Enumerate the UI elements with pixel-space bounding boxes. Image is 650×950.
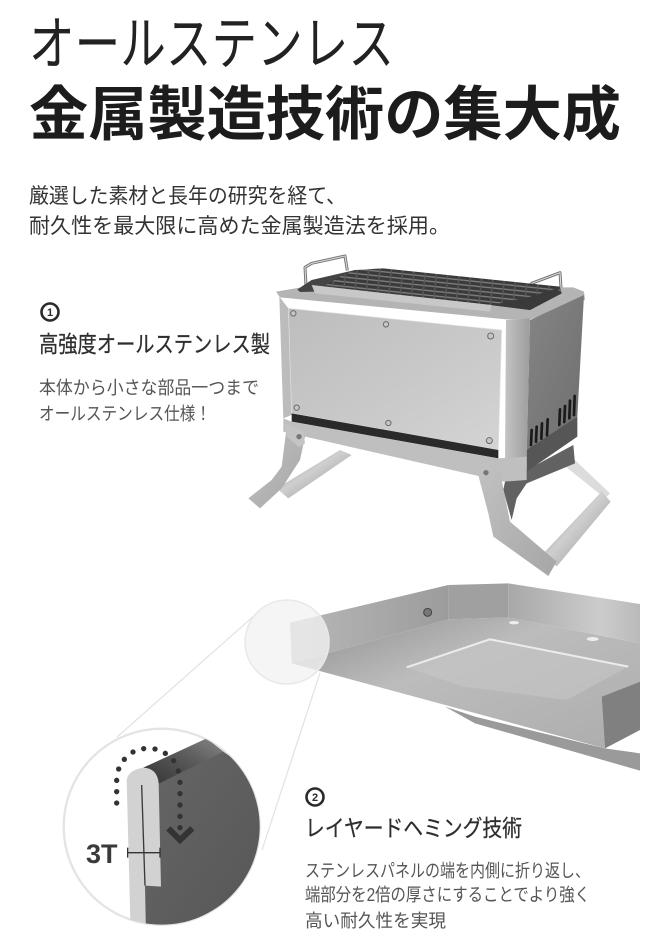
magnifier circle — [245, 600, 329, 684]
handles — [305, 256, 562, 310]
description 2: 高い耐久性を実現 — [305, 911, 446, 931]
icon: number 1: 1 — [47, 307, 53, 319]
bolt — [424, 608, 432, 616]
bottom band — [283, 418, 527, 482]
dotted arrow — [114, 746, 192, 840]
front right wall — [602, 682, 640, 748]
description 1 — [39, 378, 259, 424]
corner post — [505, 318, 530, 460]
top plate — [276, 287, 585, 319]
label: 3T: 3T — [86, 839, 118, 869]
right wall — [508, 583, 640, 643]
rear leg and bar — [248, 427, 611, 567]
dark band — [292, 413, 498, 458]
icon: number 1 — [42, 304, 58, 320]
heading: high strength stainless: 高強度オールステンレス製 — [39, 331, 270, 357]
section 2 text — [305, 788, 590, 931]
grill grate — [297, 268, 562, 312]
dark panel face — [143, 750, 260, 925]
intro text: 厳選した素材と長年の研究を経て、 — [29, 185, 346, 208]
inset ridge — [407, 639, 628, 667]
description 1: 本体から小さな部品一つまで — [39, 378, 259, 398]
icon: number 2 — [306, 788, 324, 806]
heading: layered hemming: レイヤードヘミング技術 — [305, 815, 522, 841]
fold line — [142, 785, 145, 886]
cross section — [127, 768, 161, 933]
screws — [291, 311, 494, 444]
title: line 1: オールステンレス — [29, 12, 394, 77]
description 2: ステンレスパネルの端を内側に折り返し、 — [305, 861, 590, 881]
intro text — [29, 185, 450, 238]
section 1 text — [39, 304, 270, 424]
left wall — [290, 585, 448, 663]
front panel — [288, 308, 502, 450]
underside — [445, 707, 640, 771]
title: line 2: 金属製造技術の集大成 — [29, 82, 621, 148]
inset panel — [407, 639, 628, 700]
description 1: オールステンレス仕様！ — [39, 404, 211, 424]
intro text: 耐久性を最大限に高めた金属製造法を採用。 — [29, 215, 450, 238]
icon: number 2: 2 — [312, 792, 318, 804]
tray floor — [292, 617, 640, 748]
side face with vents — [527, 295, 584, 472]
thickness marker — [128, 848, 160, 858]
description 2 — [305, 861, 590, 931]
detail circle: hemming — [64, 729, 273, 933]
corner wall — [448, 583, 508, 619]
right front leg — [285, 423, 557, 576]
fold highlight — [143, 738, 223, 783]
illustration: stainless grill — [248, 256, 611, 576]
zoom guide lines — [117, 615, 320, 850]
holes — [509, 621, 599, 641]
illustration: folded tray — [290, 583, 640, 771]
left post — [279, 297, 292, 418]
description 2: 端部分を2倍の厚さにすることでより強く — [305, 885, 590, 905]
